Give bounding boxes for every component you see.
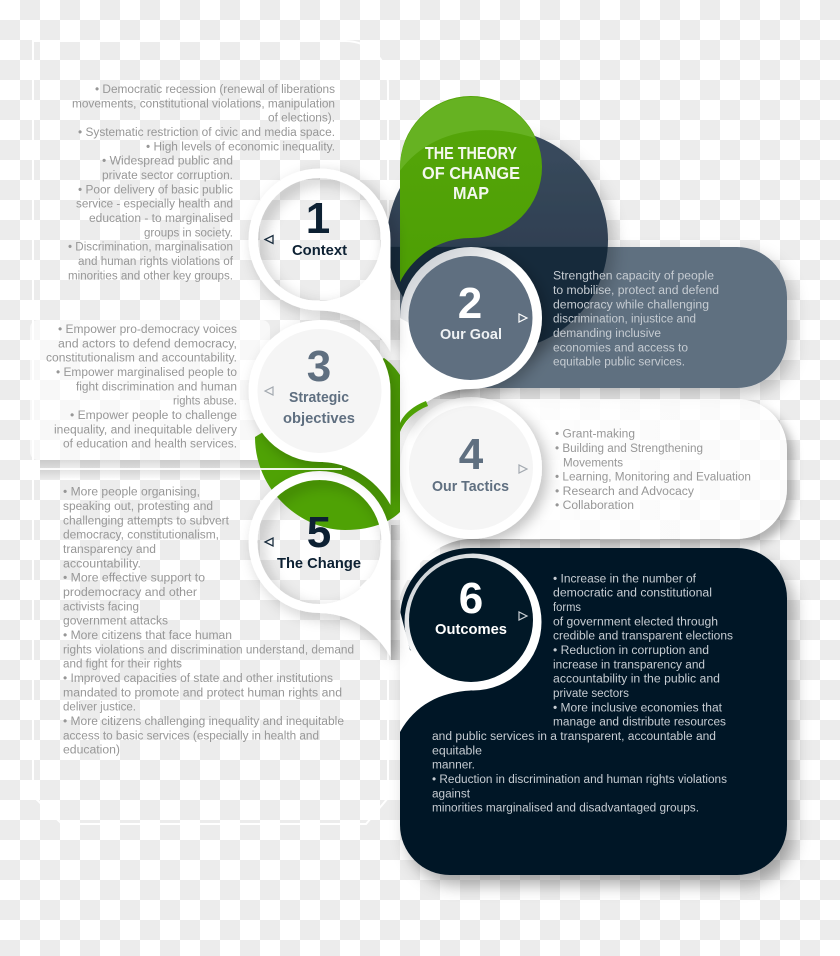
step 2 label: Our Goal [440,326,502,343]
text: outcomes: minorities marginalised and disadvantaged groups. [432,803,699,815]
text: outcomes: increase in transparency and [553,659,705,671]
text: strategic objectives: of education and health services. [63,439,237,451]
text: our tactics: • Grant-making [555,429,635,441]
text: the change: • More people organising, [63,487,200,499]
icon: arrow 3 [265,387,273,395]
circle: tactics [400,397,542,539]
text: strategic objectives [46,324,237,451]
step 3 label: objectives [283,410,355,427]
text: the change: speaking out, protesting and [63,501,213,513]
icon: arrow 4 [519,465,527,473]
text: outcomes: and public services in a transparent, accountable and [432,731,716,743]
step 2 label: 2 [458,279,482,328]
icon: arrow 2 [519,314,527,322]
step 4 label: 4 [459,430,484,479]
text: outcomes: credible and transparent elections [553,631,733,643]
text: outcomes: forms [553,602,581,614]
ghost outline panel [33,41,388,824]
text: our tactics: • Learning, Monitoring and Evaluation [555,472,751,484]
text: context: • Widespread public and [102,156,233,168]
step 1 label: 1 [306,194,330,243]
step 6 label: Outcomes [435,621,507,638]
text: our goal: Strengthen capacity of people [553,271,714,283]
text: context: • Poor delivery of basic public [78,184,233,196]
white divider line [32,468,342,470]
step 2 label [440,279,502,343]
step 3 label: Strategic [289,389,349,406]
text: strategic objectives: constitutionalism and accountability. [46,353,237,365]
step 6 label: 6 [459,574,483,623]
text: our goal [553,271,719,369]
text: strategic objectives: rights abuse. [173,396,237,408]
text: outcomes: manage and distribute resources [553,717,726,729]
text: strategic objectives: fight discrimination and human [76,381,237,393]
title: THE THEORY [425,143,517,163]
icon: arrow 1 [265,236,273,244]
text: the change: rights violations and discrimination understand, demand [63,644,354,656]
text: our goal: economies and access to [553,342,688,354]
text: context: • Discrimination, marginalisation [68,242,233,254]
text: strategic objectives: and actors to defend democracy, [58,338,237,350]
text: our goal: democracy while challenging [553,299,709,311]
dark circle behind title [387,130,608,350]
text: context: • Democratic recession (renewal of liberations [95,84,335,96]
text: our tactics: • Building and Strengthening [555,443,703,455]
text: the change: • More citizens challenging inequality and inequitable [63,716,344,728]
text: the change: mandated to promote and protect human rights and [63,687,342,699]
shape: context ring [248,168,390,352]
text: our goal: equitable public services. [553,357,685,369]
green branch arc [400,401,428,432]
panel: tactics [400,399,793,546]
text: the change [63,487,354,757]
text: context: • Systematic restriction of civic and media space. [78,127,335,139]
step 5 label [277,508,361,572]
text: the change: challenging attempts to subvert [63,515,230,527]
text: outcomes [432,573,733,815]
text: outcomes: of government elected through [553,616,718,628]
text: the change: and fight for their rights [63,659,182,671]
text: the change: democracy, constitutionalism, [63,530,219,542]
column shadow beside the change [391,525,400,660]
panel: goal background [400,247,787,388]
text: our tactics [555,429,751,512]
text: outcomes: • Increase in the number of [553,573,697,585]
text: the change: education) [63,745,120,757]
text: the change: prodemocracy and other [63,587,197,599]
title: MAP [453,183,489,203]
icon: arrow 6 [519,612,527,620]
step 4 label: Our Tactics [432,478,509,495]
text: our goal: to mobilise, protect and defend [553,285,719,297]
shadow band above the change [40,470,260,480]
text: context: and human rights violations of [78,256,234,268]
text: the change: access to basic services (especially in health and [63,730,319,742]
text: context: private sector corruption. [102,170,233,182]
step 1 label [292,194,347,259]
text: strategic objectives: • Empower marginalised people to [56,367,237,379]
text: our tactics: • Research and Advocacy [555,486,694,498]
shape: strategic objectives circle [248,320,390,505]
text: context: • High levels of economic inequality. [146,141,335,153]
text: context: of elections). [268,113,335,125]
text: outcomes: • Reduction in corruption and [553,645,709,657]
text: our tactics: Movements [563,457,623,469]
text: context: groups in society. [144,227,233,239]
text: strategic objectives: • Empower pro-democracy voices [58,324,237,336]
title: OF CHANGE [422,163,520,183]
text: outcomes: • More inclusive economies that [553,702,723,714]
step 3 label [283,342,355,427]
text: context: service - especially health and [76,199,233,211]
text: the change: accountability. [63,558,141,570]
text: the change: • More citizens that face human [63,630,232,642]
step 6 label [435,574,507,638]
text: outcomes: democratic and constitutional [553,588,712,600]
text: our tactics: • Collaboration [555,500,634,512]
text: outcomes: equitable [432,745,482,757]
tactics tail [400,468,471,597]
text: the change: transparency and [63,544,156,556]
shadow band below strategic objectives [40,460,265,469]
text: context: movements, constitutional violations, manipulation [72,98,335,110]
text: strategic objectives: • Empower people to challenge [70,410,237,422]
title teardrop [400,96,542,282]
text: outcomes: manner. [432,760,475,772]
icon: arrow 5 [265,538,273,546]
text: context: minorities and other key groups. [68,270,233,282]
text: context: education - to marginalised [89,213,233,225]
text: our goal: discrimination, injustice and [553,314,696,326]
text: the change: activists facing [63,601,139,613]
text: context [68,84,335,282]
text: outcomes: accountability in the public and [553,674,720,686]
panel: strategic objectives text backing [30,320,270,460]
step 1 label: Context [292,242,347,259]
text: the change: • More effective support to [63,573,205,585]
green circle behind objectives [255,358,400,530]
goal ring and tail [400,247,542,432]
step 5 label: 5 [307,508,331,557]
text: the change: deliver justice. [63,702,136,714]
step 5 label: The Change [277,555,361,572]
step 4 label [432,430,509,495]
text: the change: government attacks [63,616,168,628]
text: outcomes: private sectors [553,688,629,700]
text: the change: • Improved capacities of state and other institutions [63,673,333,685]
text: outcomes: • Reduction in discrimination and human rights violations [432,774,727,786]
step 3 label: 3 [307,342,331,391]
text: our goal: demanding inclusive [553,328,661,340]
outcomes ring and wedge [400,554,542,732]
text: strategic objectives: inequality, and inequitable delivery [54,424,237,436]
panel: outcomes [400,548,787,875]
shape: change ring [249,471,390,657]
text: outcomes: against [432,788,471,800]
title [422,143,520,203]
